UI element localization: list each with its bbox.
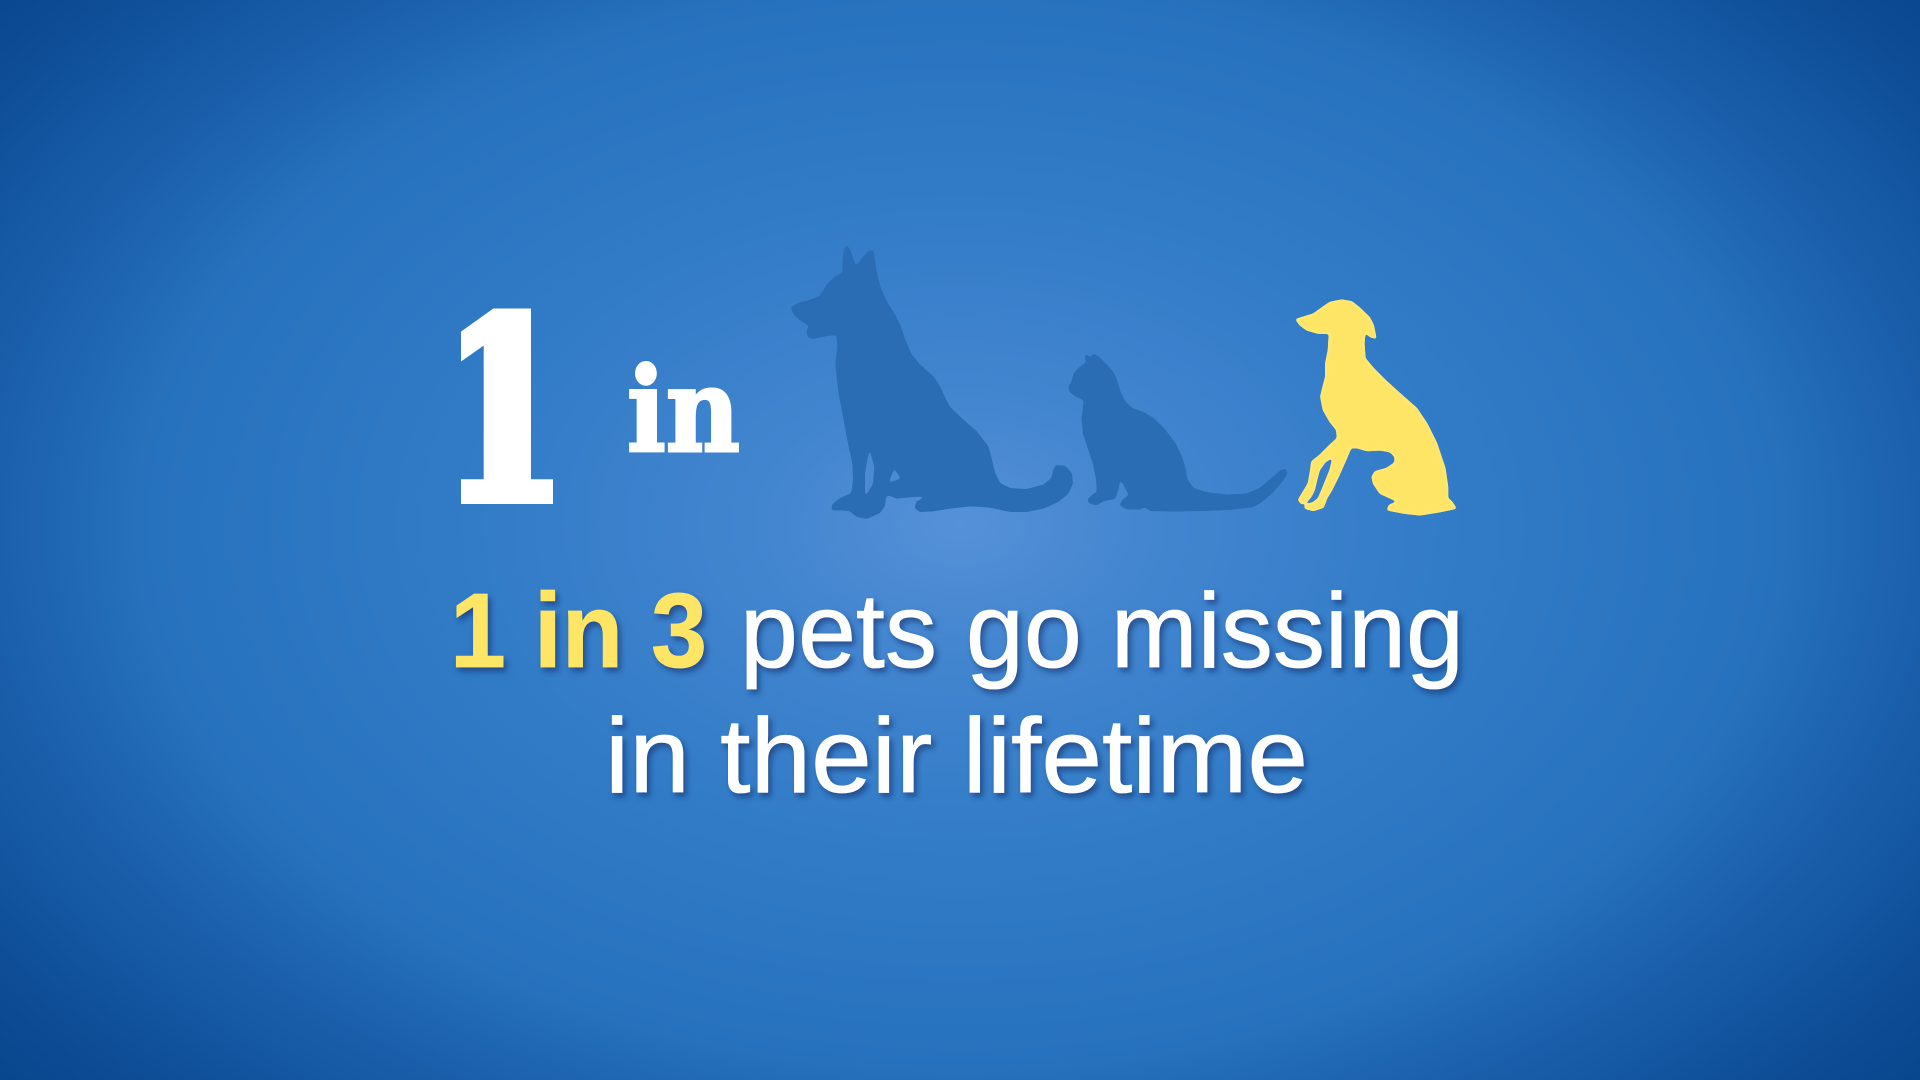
headline text (450, 572, 1464, 815)
headline line 2: in their lifetime (605, 697, 1308, 815)
headline line 1: pets go missing (740, 572, 1464, 690)
big numeral 1: 1 (430, 265, 577, 559)
word in: in (627, 342, 740, 479)
icon: large dog silhouette (791, 245, 1073, 519)
icon: yellow dog silhouette (1296, 300, 1456, 515)
icon: cat silhouette (1069, 354, 1287, 511)
highlighted figure: 1 in 3: 1 in 3 (450, 572, 707, 690)
